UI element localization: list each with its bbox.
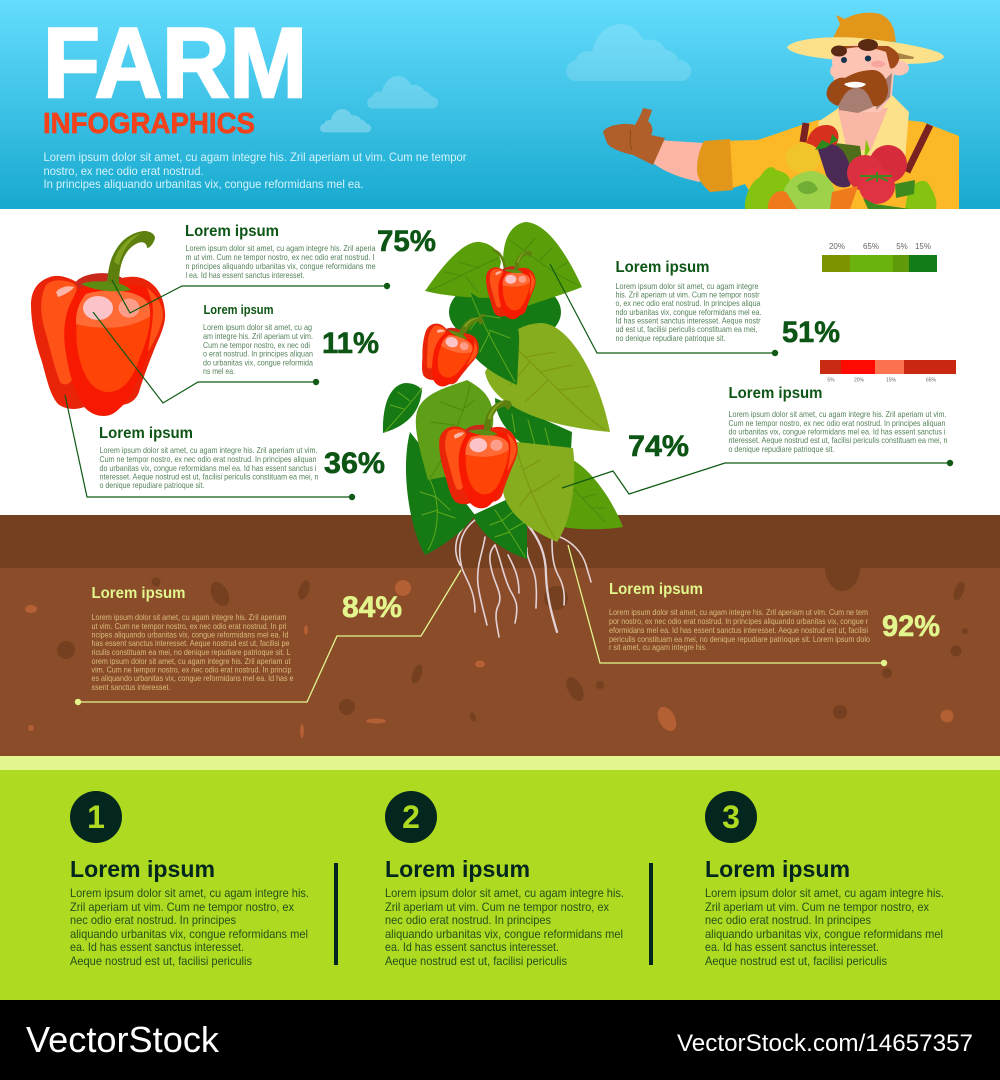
callout: 84%: 84% bbox=[342, 591, 402, 624]
bar chart: red segments: 20% bbox=[854, 378, 865, 384]
callout: 74%: o denique repudiare patrioque sit. bbox=[728, 444, 834, 454]
callout: 75%: Lorem ipsum bbox=[185, 223, 279, 240]
farmer collar and neck bbox=[818, 95, 909, 160]
step 3: 3 bbox=[722, 799, 740, 835]
farmer shirt bbox=[717, 120, 959, 209]
callout: 11%: 11% bbox=[322, 327, 379, 360]
callout: 36%: do urbanitas vix, congue reformidans mel ea. Id has essent sanctus i bbox=[100, 463, 317, 473]
step 2: Zril aperiam ut vim. Cum ne tempor nostro, ex bbox=[385, 900, 609, 914]
bar chart: green segments: 15% bbox=[915, 242, 931, 251]
callout: 51%: ud est ut, facilisi periculis constituam ea mei, bbox=[616, 324, 758, 334]
callout: 74%: Lorem ipsum bbox=[728, 385, 822, 402]
watermark url: VectorStock.com/14657357 bbox=[677, 1030, 973, 1057]
step 2 bbox=[385, 791, 624, 968]
farmer vegetables bbox=[745, 125, 936, 209]
farmer cuff bbox=[697, 139, 733, 192]
callout: 51%: o, ex nec odio erat nostrud. In principes aliqua bbox=[616, 298, 761, 308]
step 1: ea. Id has essent sanctus interesset. bbox=[70, 940, 244, 954]
cloud large bbox=[566, 24, 691, 81]
step 2: ea. Id has essent sanctus interesset. bbox=[385, 940, 559, 954]
callout: 75%: m ut vim. Cum ne tempor nostro, ex nec odio erat nostrud. I bbox=[186, 252, 374, 262]
step 1: aliquando urbanitas vix, congue reformidans mel bbox=[70, 927, 308, 941]
icon: large bell pepper bbox=[31, 231, 165, 416]
leaf: small left bbox=[383, 383, 422, 433]
callout: 74%: do urbanitas vix, congue reformidans mel ea. Id has essent sanctus i bbox=[728, 426, 946, 436]
leaf: top left bbox=[425, 242, 501, 298]
leaf: middle left bbox=[416, 380, 493, 480]
callout: 51%: ndo urbanitas vix, congue reformidans mel ea. bbox=[616, 307, 762, 317]
panel: green footer panel bbox=[0, 770, 1000, 1000]
farmer arm and glove bbox=[603, 108, 704, 182]
bar chart: red segments: 5% bbox=[827, 378, 835, 384]
step 3: Zril aperiam ut vim. Cum ne tempor nostro, ex bbox=[705, 900, 929, 914]
callout: 36%: o denique repudiare patrioque sit. bbox=[100, 480, 204, 490]
callout: 11% bbox=[93, 303, 379, 403]
callout: 75%: l ea. Id has essent sanctus interesset. bbox=[186, 270, 304, 280]
callout: 84%: ut vim. Cum ne tempor nostro, ex nec odio erat nostrud. In pri bbox=[92, 621, 287, 631]
callout: 36%: Lorem ipsum bbox=[99, 425, 193, 442]
title: FARM bbox=[43, 7, 307, 118]
bar chart: red segments: 15% bbox=[886, 378, 897, 384]
callout: 74%: nteresset. Aeque nostrud est ut, facilisi periculis constituam ea mei, n bbox=[728, 435, 948, 445]
step 1: nec odio erat nostrud. In principes bbox=[70, 913, 236, 927]
header text: nostro, ex nec odio erat nostrud. bbox=[44, 165, 204, 178]
callout: 92% bbox=[568, 545, 940, 666]
callout: 84%: riculis constituam ea mei, no denique repudiare patrioque sit. L bbox=[92, 647, 291, 657]
step 3: Lorem ipsum dolor sit amet, cu agam integre his. bbox=[705, 886, 944, 900]
leaf: center dark bbox=[465, 292, 519, 385]
callout: 84%: has essent sanctus interesset. Aeque nostrud est ut, facilisi pe bbox=[92, 638, 290, 648]
step 2: 2 bbox=[402, 799, 420, 835]
step 1: Lorem ipsum dolor sit amet, cu agam integre his. bbox=[70, 886, 309, 900]
callout: 92%: Lorem ipsum dolor sit amet, cu agam integre his. Zril aperiam ut vim. Cum ne tem bbox=[609, 607, 868, 617]
farmer suspenders bbox=[803, 123, 930, 172]
callout: 84%: ssent sanctus interesset. bbox=[92, 682, 170, 692]
leaf: top right bbox=[503, 222, 582, 311]
callout: 51%: Lorem ipsum bbox=[616, 259, 710, 276]
bar chart: green segments: 5% bbox=[896, 242, 908, 251]
callout: 36% bbox=[65, 395, 385, 500]
callout: 75% bbox=[112, 223, 436, 313]
callout: 51%: Lorem ipsum dolor sit amet, cu agam integre bbox=[616, 281, 759, 291]
callout: 51% bbox=[550, 259, 840, 356]
callout: 84%: Lorem ipsum dolor sit amet, cu agam integre his. Zril aperiam bbox=[92, 612, 286, 622]
callout: 36%: Lorem ipsum dolor sit amet, cu agam integre his. Zril aperiam ut vim. bbox=[100, 445, 318, 455]
leaf: back right bbox=[563, 460, 623, 529]
illustration: plant roots bbox=[456, 520, 591, 637]
step 2: Lorem ipsum bbox=[385, 856, 530, 882]
callout: 75%: n principes aliquando urbanitas vix, congue reformidans me bbox=[186, 261, 376, 271]
panel: black watermark bar bbox=[0, 1000, 1000, 1080]
leaf: lower left dark bbox=[406, 432, 475, 555]
step 2: aliquando urbanitas vix, congue reformidans mel bbox=[385, 927, 623, 941]
step 2: Lorem ipsum dolor sit amet, cu agam integre his. bbox=[385, 886, 624, 900]
callout: 11%: do urbanitas vix, congue reformida bbox=[203, 358, 313, 368]
callout: 75%: Lorem ipsum dolor sit amet, cu agam integre his. Zril aperia bbox=[186, 243, 376, 253]
icon: middle pepper on plant bbox=[411, 303, 489, 394]
step 3: ea. Id has essent sanctus interesset. bbox=[705, 940, 879, 954]
step 1 bbox=[70, 791, 309, 968]
farmer head bbox=[827, 39, 909, 113]
callout: 11%: am integre his. Zril aperiam ut vim. bbox=[203, 331, 313, 341]
step 3: Lorem ipsum bbox=[705, 856, 850, 882]
callout: 11%: o erat nostrud. In principes aliquan bbox=[203, 348, 313, 358]
bar chart: red segments bbox=[820, 360, 956, 384]
leaf: large light bbox=[485, 323, 610, 432]
callout: 36%: Cum ne tempor nostro, ex nec odio erat nostrud. In principes aliquan bbox=[100, 454, 317, 464]
callout: 84%: Lorem ipsum bbox=[92, 585, 186, 602]
step 3 bbox=[705, 791, 944, 968]
icon: top pepper on plant bbox=[486, 250, 536, 319]
callout: 51%: no denique repudiare patrioque sit. bbox=[616, 333, 726, 343]
callout: 11%: Lorem ipsum dolor sit amet, cu ag bbox=[203, 322, 312, 332]
panel: sky header bbox=[0, 0, 1000, 209]
callout: 75%: 75% bbox=[377, 225, 436, 258]
step 1: Lorem ipsum bbox=[70, 856, 215, 882]
callout: 84%: es aliquando urbanitas vix, congue reformidans mel ea. Id has e bbox=[92, 673, 294, 683]
callout: 11%: ns mel ea. bbox=[203, 366, 235, 376]
callout: 51%: Id has essent sanctus interesset. Aeque nostr bbox=[616, 316, 761, 326]
illustration: pepper plant bbox=[383, 222, 623, 559]
leaf: right lower dark bbox=[495, 398, 572, 468]
subtitle: INFOGRAPHICS bbox=[43, 108, 255, 140]
step 3: nec odio erat nostrud. In principes bbox=[705, 913, 871, 927]
leaf: lower right light bbox=[503, 442, 574, 542]
callout: 84%: ncipes aliquando urbanitas vix, congue reformidans mel ea. Id bbox=[92, 630, 289, 640]
step 1: Aeque nostrud est ut, facilisi periculis bbox=[70, 954, 252, 968]
callout: 84%: orem ipsum dolor sit amet, cu agam integre his. Zril aperiam ut bbox=[92, 656, 291, 666]
callout: 92%: periculis constituam ea mei, no denique repudiare patrioque sit. Lorem ipsum dolo bbox=[609, 634, 870, 644]
soil speckles bbox=[25, 568, 968, 738]
callout: 51%: his. Zril aperiam ut vim. Cum ne tempor nostr bbox=[616, 290, 760, 300]
callout: 84% bbox=[75, 570, 461, 705]
callout: 36%: 36% bbox=[324, 447, 385, 480]
callout: 92%: r sit amet, cu agam integre his. bbox=[609, 642, 707, 652]
step 3: Aeque nostrud est ut, facilisi periculis bbox=[705, 954, 887, 968]
callout: 84%: vim. Cum ne tempor nostro, ex nec odio erat nostrud. In princip bbox=[92, 664, 292, 674]
callout: 92%: eformidans mel ea. Id has essent sanctus interesset. Aeque nostrud est ut, facilisi bbox=[609, 625, 868, 635]
callout: 11%: Cum ne tempor nostro, ex nec odi bbox=[203, 340, 310, 350]
illustration: farmer bbox=[603, 13, 959, 209]
bar chart: green segments: 20% bbox=[829, 242, 845, 251]
header text: In principes aliquando urbanitas vix, congue reformidans mel ea. bbox=[44, 178, 364, 191]
bar chart: red segments: 65% bbox=[926, 378, 937, 384]
panel: lime stripe bbox=[0, 756, 1000, 770]
callout: 92%: 92% bbox=[882, 610, 940, 643]
callout: 74% bbox=[562, 385, 953, 494]
callout: 92%: por nostro, ex nec odio erat nostrud. In principes aliquando urbanitas vix, congue r bbox=[609, 616, 868, 626]
panel: soil bbox=[0, 515, 1000, 756]
step 1: Zril aperiam ut vim. Cum ne tempor nostro, ex bbox=[70, 900, 294, 914]
icon: lower pepper on plant bbox=[439, 400, 518, 508]
farmer hat bbox=[787, 13, 944, 64]
callout: 51%: 51% bbox=[782, 316, 840, 349]
step 3: aliquando urbanitas vix, congue reformidans mel bbox=[705, 927, 943, 941]
bar chart: green segments bbox=[822, 242, 937, 272]
bar chart: green segments: 65% bbox=[863, 242, 879, 251]
step 2: nec odio erat nostrud. In principes bbox=[385, 913, 551, 927]
leaf: back dark bbox=[449, 278, 561, 346]
step 1: 1 bbox=[87, 799, 105, 835]
header text: Lorem ipsum dolor sit amet, cu agam integre his. Zril aperiam ut vim. Cum ne tempor bbox=[44, 151, 467, 164]
callout: 74%: Cum ne tempor nostro, ex nec odio erat nostrud. In principes aliquan bbox=[728, 418, 946, 428]
callout: 74%: 74% bbox=[628, 430, 689, 463]
header text bbox=[44, 151, 467, 191]
callout: 74%: Lorem ipsum dolor sit amet, cu agam integre his. Zril aperiam ut vim. bbox=[728, 409, 946, 419]
step 2: Aeque nostrud est ut, facilisi periculis bbox=[385, 954, 567, 968]
leaf: lower center dark bbox=[473, 498, 527, 559]
watermark logo: VectorStock bbox=[26, 1019, 220, 1060]
callout: 36%: nteresset. Aeque nostrud est ut, facilisi periculis constituam ea mei, n bbox=[100, 472, 319, 482]
callout: 11%: Lorem ipsum bbox=[204, 303, 274, 317]
cloud medium bbox=[367, 76, 438, 108]
cloud small bbox=[320, 109, 371, 132]
callout: 92%: Lorem ipsum bbox=[609, 581, 703, 598]
